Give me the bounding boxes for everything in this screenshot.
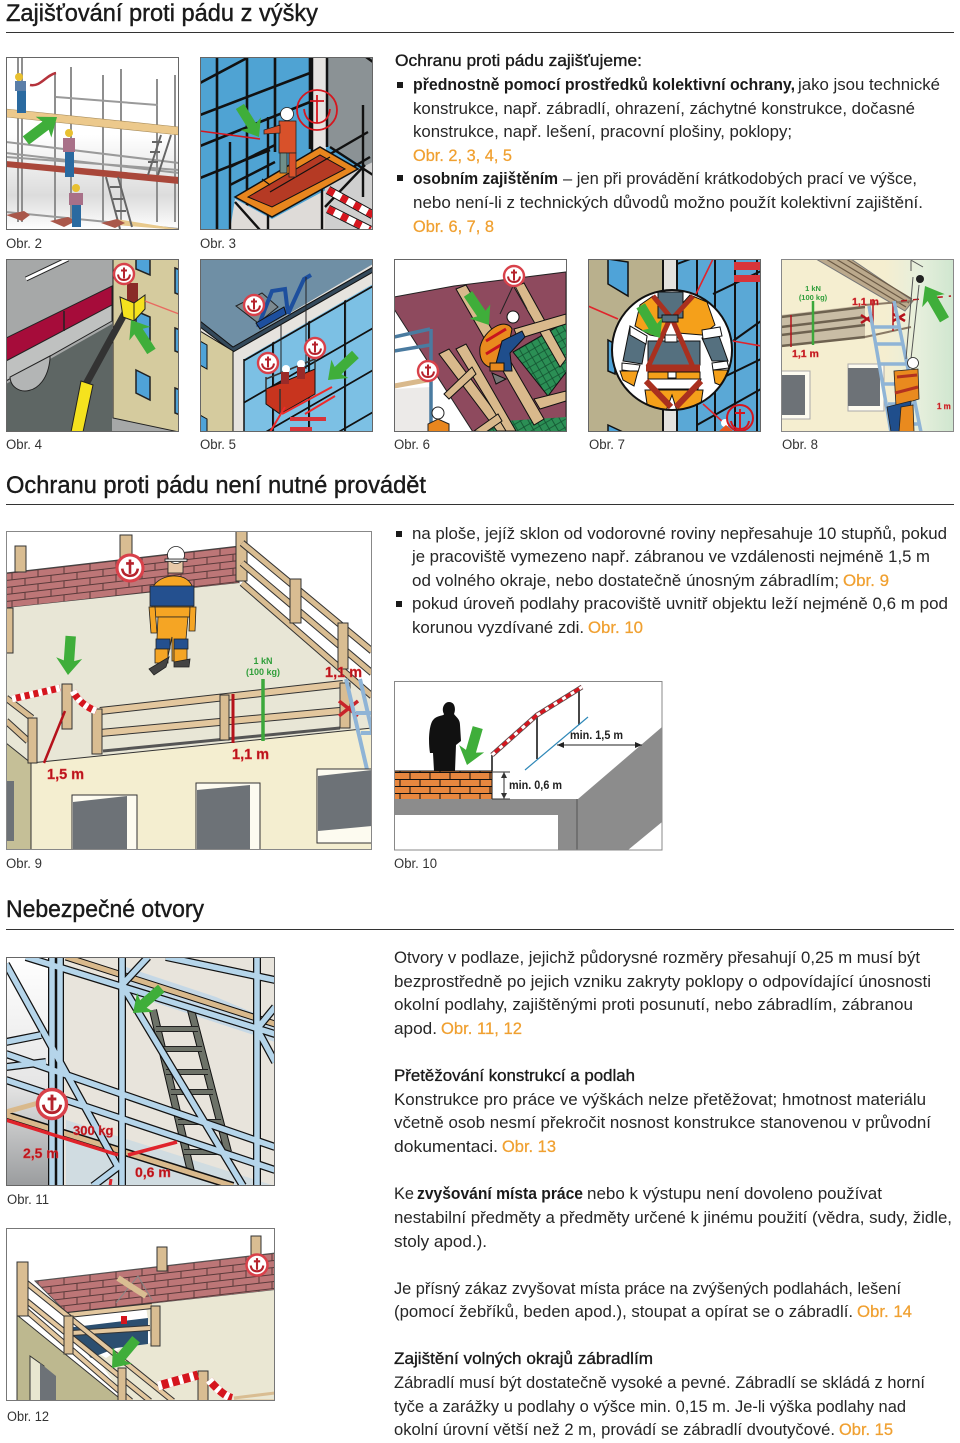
bulleted text: when not needed: na ploše, jejíž sklon od vodorovné roviny nepřesahuje 10 stupňů, pokud — [412, 524, 947, 543]
bulleted text: how to secure: – jen při provádění krátkodobých prací ve výšce, — [563, 169, 917, 188]
text: securing free edges — [394, 1349, 925, 1439]
figure 9: flat roof with guard rail and barrier: 1,5 m — [47, 767, 84, 783]
bulleted text: how to secure: konstrukce, např. zábradlí, ohrazení, záchytné konstrukce, dočasné — [413, 99, 915, 118]
caption: Obr. 9 — [6, 856, 42, 871]
figure 8: ladder with fall arrester: (100 kg) — [799, 293, 828, 302]
caption: Obr. 7 — [589, 437, 625, 452]
bulleted text: how to secure — [395, 51, 940, 236]
figure 12: railed floor opening — [6, 1228, 275, 1401]
caption: Obr. 6 — [394, 437, 430, 452]
heading: protection not needed: Ochranu proti pádu není nutné provádět — [6, 472, 426, 499]
figure 4: boom lift at building — [6, 259, 179, 432]
text: overloading — [394, 1066, 931, 1156]
bulleted text: how to secure: Ochranu proti pádu zajišťujeme: — [395, 51, 642, 70]
text: strict prohibition: (pomocí žebříků, beden apod.), stoupat a opírat se o zábradlí. — [394, 1302, 853, 1321]
text: strict prohibition: Je přísný zákaz zvyšovat místa práce na zvýšených podlahách, lešení — [394, 1279, 901, 1298]
text: floor openings: bezprostředně po jejich vzniku zakryty poklopy o odpovídající únosnosti — [394, 972, 931, 991]
text: floor openings — [394, 948, 931, 1038]
caption: Obr. 10 — [394, 856, 437, 871]
text: raising the work place: stoly apod.). — [394, 1232, 487, 1251]
caption: Obr. 3 — [200, 236, 236, 251]
figure 8: ladder with fall arrester: 1 kN — [805, 284, 821, 293]
heading: dangerous openings: Nebezpečné otvory — [6, 896, 204, 923]
caption: Obr. 4 — [6, 437, 42, 452]
figure 8: ladder with fall arrester — [781, 259, 954, 432]
text: raising the work place — [394, 1184, 952, 1251]
text: overloading: Konstrukce pro práce ve výškách nelze přetěžovat; hmotnost materiálu — [394, 1090, 926, 1109]
text: raising the work place: nebo k výstupu není dovoleno používat — [587, 1184, 882, 1203]
text: floor openings: okolní podlahy, zajištěnými proti posunutí, nebo zábradlím, zábranou — [394, 995, 913, 1014]
text: floor openings: Obr. 11, 12 — [441, 1019, 522, 1038]
caption: Obr. 11 — [7, 1192, 49, 1207]
caption: Obr. 12 — [7, 1409, 49, 1424]
heading: fall protection: Zajišťování proti pádu z výšky — [6, 0, 318, 27]
bulleted text: when not needed: pokud úroveň podlahy pracoviště uvnitř objektu leží nejméně 0,6 m pod — [412, 594, 948, 613]
figure 8: ladder with fall arrester: 1,1 m — [852, 296, 879, 308]
bulleted text: when not needed: od volného okraje, nebo dostatečně únosným zábradlím; — [412, 571, 839, 590]
text: raising the work place: zvyšování místa práce — [417, 1184, 583, 1203]
caption: Obr. 8 — [782, 437, 818, 452]
figure 10: brick parapet section diagram: min. 1,5 m — [570, 730, 623, 742]
figure 3: worker on scaffold platform — [200, 57, 373, 230]
figure 11: scaffold frame with load limits: 2,5 m — [23, 1145, 59, 1161]
figure 10: brick parapet section diagram: min. 0,6 m — [509, 780, 562, 792]
bulleted text: how to secure: nebo není-li z technických důvodů možno použít kolektivní zajištění. — [413, 193, 923, 212]
figure 9: flat roof with guard rail and barrier: 1 kN — [253, 656, 273, 666]
text: securing free edges: tyče a zarážky u podlahy o výšce min. 0,15 m. Je-li výška podlahy nad — [394, 1397, 906, 1416]
figure 9: flat roof with guard rail and barrier: 1,1 m — [325, 665, 362, 681]
figure 11: scaffold frame with load limits: 300 kg — [73, 1123, 114, 1138]
text: overloading: dokumentaci. — [394, 1137, 498, 1156]
bulleted text: when not needed: Obr. 10 — [588, 618, 643, 637]
text: securing free edges: okolní úrovní větší než 2 m, provádí se zábradlí dvoutyčové. — [394, 1420, 835, 1439]
bulleted text: how to secure: osobním zajištěním — [413, 169, 558, 188]
text: floor openings: Otvory v podlaze, jejichž půdorysné rozměry přesahují 0,25 m musí být — [394, 948, 920, 967]
figure 8: ladder with fall arrester: 1,1 m — [792, 348, 819, 360]
caption: Obr. 2 — [6, 236, 42, 251]
text: strict prohibition — [394, 1279, 912, 1321]
bulleted text: when not needed: Obr. 9 — [843, 571, 889, 590]
bulleted text: how to secure: konstrukce, např. lešení, pracovní plošiny, poklopy; — [413, 122, 792, 141]
text: overloading: včetně osob nesmí překročit nosnost konstrukce stanovenou v průvodní — [394, 1113, 931, 1132]
bulleted text: how to secure: přednostně pomocí prostředků kolektivní ochrany, — [413, 75, 795, 94]
text: raising the work place: nestabilní předměty a předměty určené k jinému použití (vědra, sudy, židle, — [394, 1208, 952, 1227]
bulleted text: how to secure: jako jsou technické — [797, 75, 940, 94]
figure 7: harness detail in magnifier — [588, 259, 761, 432]
figure 8: ladder with fall arrester: 1 m — [937, 402, 951, 411]
text: floor openings: apod. — [394, 1019, 437, 1038]
figure 9: flat roof with guard rail and barrier: (100 kg) — [246, 667, 280, 677]
figure 9: flat roof with guard rail and barrier — [6, 531, 372, 850]
text: securing free edges: Zajištění volných okrajů zábradlím — [394, 1349, 653, 1368]
figure 2: scaffold with workers — [6, 57, 179, 230]
figure 5: suspended cradle on facade — [200, 259, 373, 432]
figure 6: worker on sloped roof — [394, 259, 567, 432]
text: overloading: Přetěžování konstrukcí a podlah — [394, 1066, 635, 1085]
figure 11: scaffold frame with load limits: 0,6 m — [135, 1164, 171, 1180]
text: overloading: Obr. 13 — [502, 1137, 556, 1156]
figure 9: flat roof with guard rail and barrier: 1,1 m — [232, 747, 269, 763]
text: securing free edges: Zábradlí musí být dostatečně vysoké a pevné. Zábradlí se skládá z horní — [394, 1373, 925, 1392]
caption: Obr. 5 — [200, 437, 236, 452]
bulleted text: how to secure: Obr. 2, 3, 4, 5 — [413, 146, 512, 165]
text: strict prohibition: Obr. 14 — [857, 1302, 912, 1321]
text: raising the work place: Ke — [394, 1184, 414, 1203]
bulleted text: how to secure: Obr. 6, 7, 8 — [413, 217, 494, 236]
figure 10: brick parapet section diagram — [394, 681, 662, 850]
bulleted text: when not needed: korunou vyzdívané zdi. — [412, 618, 584, 637]
bulleted text: when not needed — [396, 524, 948, 637]
text: securing free edges: Obr. 15 — [839, 1420, 893, 1439]
figure 11: scaffold frame with load limits — [6, 957, 275, 1186]
bulleted text: when not needed: je pracoviště vymezeno např. zábranou ve vzdálenosti nejméně 1,5 m — [411, 547, 930, 566]
